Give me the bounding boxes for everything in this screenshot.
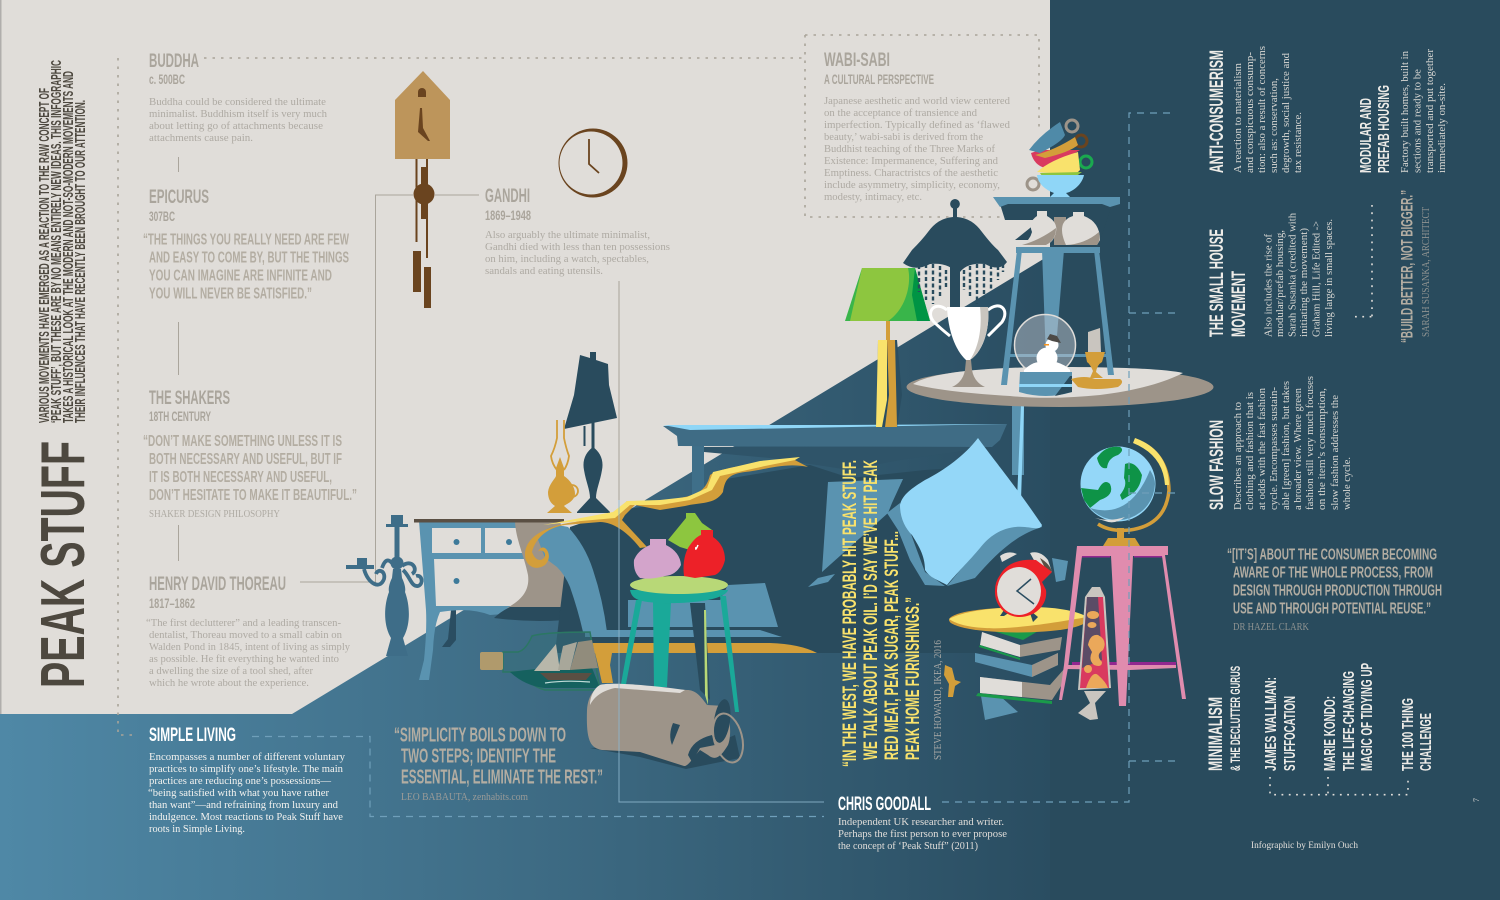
text block: Slow Fashion: fashion still very much focuses	[1304, 376, 1316, 510]
text block: Slow Fashion: a broader view. Where green	[1292, 387, 1304, 510]
text block: Wabi-Sabi: Emptiness. Charactristcs of the aesthetic	[824, 167, 998, 179]
illustration: pillow	[887, 438, 1042, 586]
text block: Wabi-Sabi: WABI-SABI	[824, 49, 890, 71]
text block: Simple Living: roots in Simple Living.	[149, 823, 245, 835]
text block: Anti-Consumerism: A reaction to materialism	[1232, 62, 1244, 173]
text block: Henry David Thoreau: Walden Pond in 1845, intent of living as simply	[149, 641, 351, 653]
text block: Modular and Prefab Housing: MODULAR AND	[1358, 98, 1375, 173]
text block: Minimalism and the declutter gurus	[1205, 663, 1435, 771]
quote: Sarah Susanka: SARAH SUSANKA, ARCHITECT	[1421, 207, 1432, 337]
text block: Simple Living: indulgence. Most reactions to Peak Stuff have	[149, 811, 343, 823]
text block: Anti-Consumerism: tion: also a result of concerns	[1256, 46, 1268, 173]
quote: Steve Howard (rotated yellow): WE TALK ABOUT PEAK OIL. I’D SAY WE’VE HIT PEAK	[860, 460, 882, 760]
callout lines: grey and blue connectors	[252, 113, 1408, 816]
text block: Simple Living	[148, 724, 346, 835]
text block: Modular and Prefab Housing: PREFAB HOUSING	[1376, 85, 1393, 173]
text block: Henry David Thoreau: HENRY DAVID THOREAU	[149, 573, 286, 595]
text block: Wabi-Sabi	[824, 49, 1011, 203]
text block: Buddha	[149, 50, 328, 144]
text block: The Shakers: “DON’T MAKE SOMETHING UNLESS IT IS	[143, 433, 342, 450]
text block: Buddha: minimalist. Buddhism itself is very much	[149, 108, 328, 120]
illustration: trophy	[931, 306, 1005, 387]
text block: Simple Living: than want”—and refraining from luxury and	[149, 799, 339, 811]
illustration: dresser	[414, 519, 590, 680]
quote: Steve Howard (rotated yellow): RED MEAT, PEAK SUGAR, PEAK STUFF...	[881, 531, 903, 760]
illustration: candelabra	[346, 515, 422, 656]
illustration: round table	[906, 367, 1214, 500]
text block: Modular and Prefab Housing	[1358, 49, 1448, 173]
quote: Leo Babauta: TWO STEPS; IDENTIFY THE	[401, 746, 556, 768]
illustration: grey stone jug	[587, 684, 748, 769]
text block: The Shakers	[143, 387, 357, 520]
background: diagonal floor and lower band	[0, 255, 1050, 900]
text block: Wabi-Sabi: A CULTURAL PERSPECTIVE	[824, 71, 934, 87]
text block: Gandhi	[485, 185, 670, 277]
icon: cuckoo clock	[395, 71, 450, 308]
text block: Anti-Consumerism	[1206, 46, 1304, 173]
text block: Minimalism and the declutter gurus: MARIE KONDO:	[1322, 696, 1339, 771]
text block: The Small House Movement	[1206, 212, 1335, 337]
text block: Slow Fashion: at odds with the fast fashion	[1256, 387, 1268, 510]
text block: Gandhi: Also arguably the ultimate minimalist,	[485, 229, 650, 241]
quote: Steve Howard (rotated yellow): PEAK HOME FURNISHINGS.”	[902, 597, 924, 760]
text block: Wabi-Sabi: Japanese aesthetic and world view centered	[824, 95, 1011, 107]
credit: Infographic by Emilyn Ouch	[1251, 840, 1358, 851]
text block: The Small House Movement: MOVEMENT	[1228, 271, 1250, 337]
text block: Henry David Thoreau: dentalist, Thoreau moved to a small cabin on	[149, 629, 343, 641]
text block: Epicurus	[143, 186, 350, 302]
text block: Epicurus: YOU CAN IMAGINE ARE INFINITE AND	[149, 268, 332, 284]
text block: Epicurus: YOU WILL NEVER BE SATISFIED.”	[149, 286, 312, 302]
quote: Leo Babauta: “SIMPLICITY BOILS DOWN TO	[394, 724, 566, 746]
text block: The Small House Movement: THE SMALL HOUSE	[1206, 229, 1228, 337]
illustration: top stool and shelf	[993, 197, 1120, 385]
text block: Buddha: about letting go of attachments because	[149, 120, 323, 132]
text block: The Shakers: SHAKER DESIGN PHILOSOPHY	[149, 509, 280, 520]
text block: The Small House Movement: initiating the movement)	[1298, 228, 1310, 337]
quote: Leo Babauta: ESSENTIAL, ELIMINATE THE REST.”	[401, 766, 603, 788]
text block: Buddha: attachments cause pain.	[149, 132, 253, 144]
intro text	[37, 60, 89, 423]
text block: Henry David Thoreau: which he wrote about the experience.	[149, 677, 309, 689]
text block: Slow Fashion	[1206, 376, 1353, 510]
text block: Gandhi: 1869–1948	[485, 207, 531, 223]
text block: Epicurus: EPICURUS	[149, 186, 209, 208]
text block: Simple Living: practices to simplify one’s lifestyle. The main	[149, 763, 344, 775]
text block: Anti-Consumerism: such as: conservation,	[1268, 78, 1280, 173]
text block: Chris Goodall: the concept of ‘Peak Stuff” (2011)	[838, 840, 978, 852]
quote: Dr Hazel Clark	[1227, 546, 1442, 633]
illustration: fringed lamp	[903, 199, 1007, 307]
text block: Minimalism and the declutter gurus: JAMES WALLMAN:	[1263, 677, 1280, 771]
text block: Slow Fashion: able [green] fashion, but takes	[1280, 381, 1292, 510]
text block: Simple Living: SIMPLE LIVING	[149, 724, 236, 746]
text block: Modular and Prefab Housing: sections and ready to be	[1412, 69, 1424, 173]
text block: Henry David Thoreau	[146, 573, 351, 689]
text block: Minimalism and the declutter gurus: & THE DECLUTTER GURUS	[1227, 666, 1243, 771]
quote: Steve Howard (rotated yellow)	[839, 460, 944, 767]
text block: Minimalism and the declutter gurus: MAGIC OF TIDYING UP	[1359, 663, 1376, 771]
text block: Wabi-Sabi: modesty, intimacy, etc.	[824, 191, 922, 203]
text block: Minimalism and the declutter gurus: STUFFOCATION	[1282, 696, 1299, 771]
illustration: snow globe	[1014, 314, 1076, 396]
text block: The Shakers: THE SHAKERS	[149, 387, 230, 409]
text block: Minimalism and the declutter gurus: THE LIFE-CHANGING	[1341, 671, 1358, 771]
page number: 7	[1472, 798, 1481, 802]
text block: Slow Fashion: slow fashion addresses the	[1329, 395, 1341, 510]
text block: Chris Goodall	[838, 793, 1007, 852]
illustration: ship in a bottle	[480, 632, 600, 690]
text block: Slow Fashion: cycle. Encompasses sustain-	[1268, 387, 1280, 510]
text block: The Shakers: 18TH CENTURY	[149, 408, 211, 424]
text block: The Small House Movement: Sarah Susanka (credited with	[1286, 212, 1298, 337]
text block: Wabi-Sabi: Buddhist teaching of the Three Marks of	[824, 143, 995, 155]
illustration: yellow side table	[949, 607, 1087, 632]
text block: Modular and Prefab Housing: Factory built homes, built in	[1399, 50, 1411, 173]
text block: Slow Fashion: SLOW FASHION	[1206, 420, 1228, 510]
illustration: alarm clock	[995, 552, 1052, 622]
text block: Chris Goodall: Perhaps the first person to ever propose	[838, 828, 1007, 840]
illustration: globe	[1080, 438, 1169, 546]
text block: The Small House Movement: modular/prefab housing,	[1274, 230, 1286, 337]
text block: Anti-Consumerism: and conspicuous consump-	[1244, 52, 1256, 173]
text block: Minimalism and the declutter gurus: MINIMALISM	[1205, 697, 1227, 771]
illustration: dark table lamp	[564, 352, 617, 513]
text block: The Shakers: DON’T HESITATE TO MAKE IT BEAUTIFUL.”	[149, 487, 357, 504]
text block: Wabi-Sabi: include asymmetry, simplicity, economy,	[824, 179, 1000, 191]
text block: The Shakers: IT IS BOTH NECESSARY AND USEFUL,	[149, 469, 332, 486]
text block: The Small House Movement: Graham Hill, Life Edited ->	[1310, 221, 1322, 337]
icon: wall clock	[558, 128, 628, 198]
text block: The Small House Movement: Also includes the rise of	[1262, 234, 1274, 337]
text block: Slow Fashion: whole cycle.	[1341, 457, 1353, 510]
quote: Steve Howard (rotated yellow): “IN THE WEST, WE HAVE PROBABLY HIT PEAK STUFF.	[839, 460, 861, 767]
text block: Simple Living: “being satisfied with what you have rather	[148, 787, 329, 799]
text block: Simple Living: practices are reducing one’s possessions—	[149, 775, 331, 787]
text block: Gandhi: sandals and eating utensils.	[485, 265, 603, 277]
text block: Modular and Prefab Housing: immediately on-site.	[1436, 83, 1448, 173]
illustration: pink stool	[1059, 546, 1186, 706]
text block: Anti-Consumerism: degrowth, social justice and	[1280, 52, 1292, 173]
quote: Sarah Susanka	[1398, 190, 1432, 343]
quote: Dr Hazel Clark: DR HAZEL CLARK	[1233, 622, 1310, 633]
text block: Henry David Thoreau: “The first declutterer” and a leading transcen-	[146, 617, 341, 629]
quote: Leo Babauta	[394, 724, 603, 803]
text block: Chris Goodall: CHRIS GOODALL	[838, 793, 931, 815]
text block: Modular and Prefab Housing: transported and put together	[1424, 49, 1436, 173]
text block: Epicurus: 307BC	[149, 208, 175, 224]
text block: Simple Living: Encompasses a number of different voluntary	[149, 751, 346, 763]
illustration: lava lamp	[1078, 587, 1111, 720]
text block: Wabi-Sabi: imperfection. Typically defined as ‘flawed	[824, 119, 1011, 131]
text block: Slow Fashion: clothing and fashion that is	[1244, 392, 1256, 510]
text block: Buddha: c. 500BC	[149, 71, 185, 87]
illustration: desk	[663, 424, 1007, 516]
text block: The Small House Movement: living large in small spaces.	[1323, 219, 1335, 337]
text block: Slow Fashion: on the item’s consumption,	[1316, 388, 1328, 510]
illustration: sofa	[525, 457, 1000, 683]
illustration: candle holder	[1071, 328, 1122, 389]
text block: Wabi-Sabi: beauty,’ wabi-sabi is derived from the	[824, 131, 983, 143]
text block: Slow Fashion: Describes an approach to	[1232, 402, 1244, 510]
text block: Gandhi: Gandhi died with less than ten possessions	[485, 241, 670, 253]
text block: Epicurus: “THE THINGS YOU REALLY NEED ARE FEW	[143, 232, 350, 248]
text block: Epicurus: AND EASY TO COME BY, BUT THE THINGS	[149, 250, 349, 266]
background: dark right panel	[1050, 0, 1500, 900]
text block: Chris Goodall: Independent UK researcher and writer.	[838, 816, 1004, 828]
title: Peak Stuff: PEAK STUFF	[29, 441, 98, 688]
text block: Minimalism and the declutter gurus: THE 100 THING	[1400, 698, 1417, 771]
text block: Wabi-Sabi: Existence: Impermanence, Suffering and	[824, 155, 999, 167]
text block: Henry David Thoreau: as possible. He fit everything he wanted into	[149, 653, 339, 665]
illustration: small blue stool fragment	[1052, 558, 1068, 582]
quote: Sarah Susanka: “BUILD BETTER, NOT BIGGER.”	[1398, 190, 1416, 343]
quote: Steve Howard (rotated yellow): STEVE HOWARD, IKEA, 2016	[933, 640, 944, 760]
text block: Wabi-Sabi: on the acceptance of transience and	[824, 107, 978, 119]
illustration: stacked teacups	[1027, 120, 1092, 197]
illustration: green lamp	[845, 268, 930, 427]
text block: The Shakers: BOTH NECESSARY AND USEFUL, BUT IF	[149, 451, 342, 468]
illustration: teal stool with vases	[621, 513, 739, 712]
text block: Buddha: Buddha could be considered the ultimate	[149, 96, 326, 108]
illustration: oil lamp	[547, 420, 578, 513]
quote: Leo Babauta: LEO BABAUTA, zenhabits.com	[401, 792, 528, 803]
text block: Anti-Consumerism: tax resistance.	[1292, 112, 1304, 173]
text block: Gandhi: on him, including a watch, spectables,	[485, 253, 649, 265]
text block: Henry David Thoreau: a dwelling the size of a tool shed, after	[149, 665, 313, 677]
text block: Buddha: BUDDHA	[149, 50, 199, 72]
illustration: books	[975, 630, 1065, 720]
timeline connector lines	[118, 35, 1039, 735]
icon: gold chevron	[944, 665, 961, 697]
text block: Henry David Thoreau: 1817–1862	[149, 595, 195, 611]
text block: Minimalism and the declutter gurus: CHALLENGE	[1418, 713, 1435, 771]
text block: Gandhi: GANDHI	[485, 185, 530, 207]
